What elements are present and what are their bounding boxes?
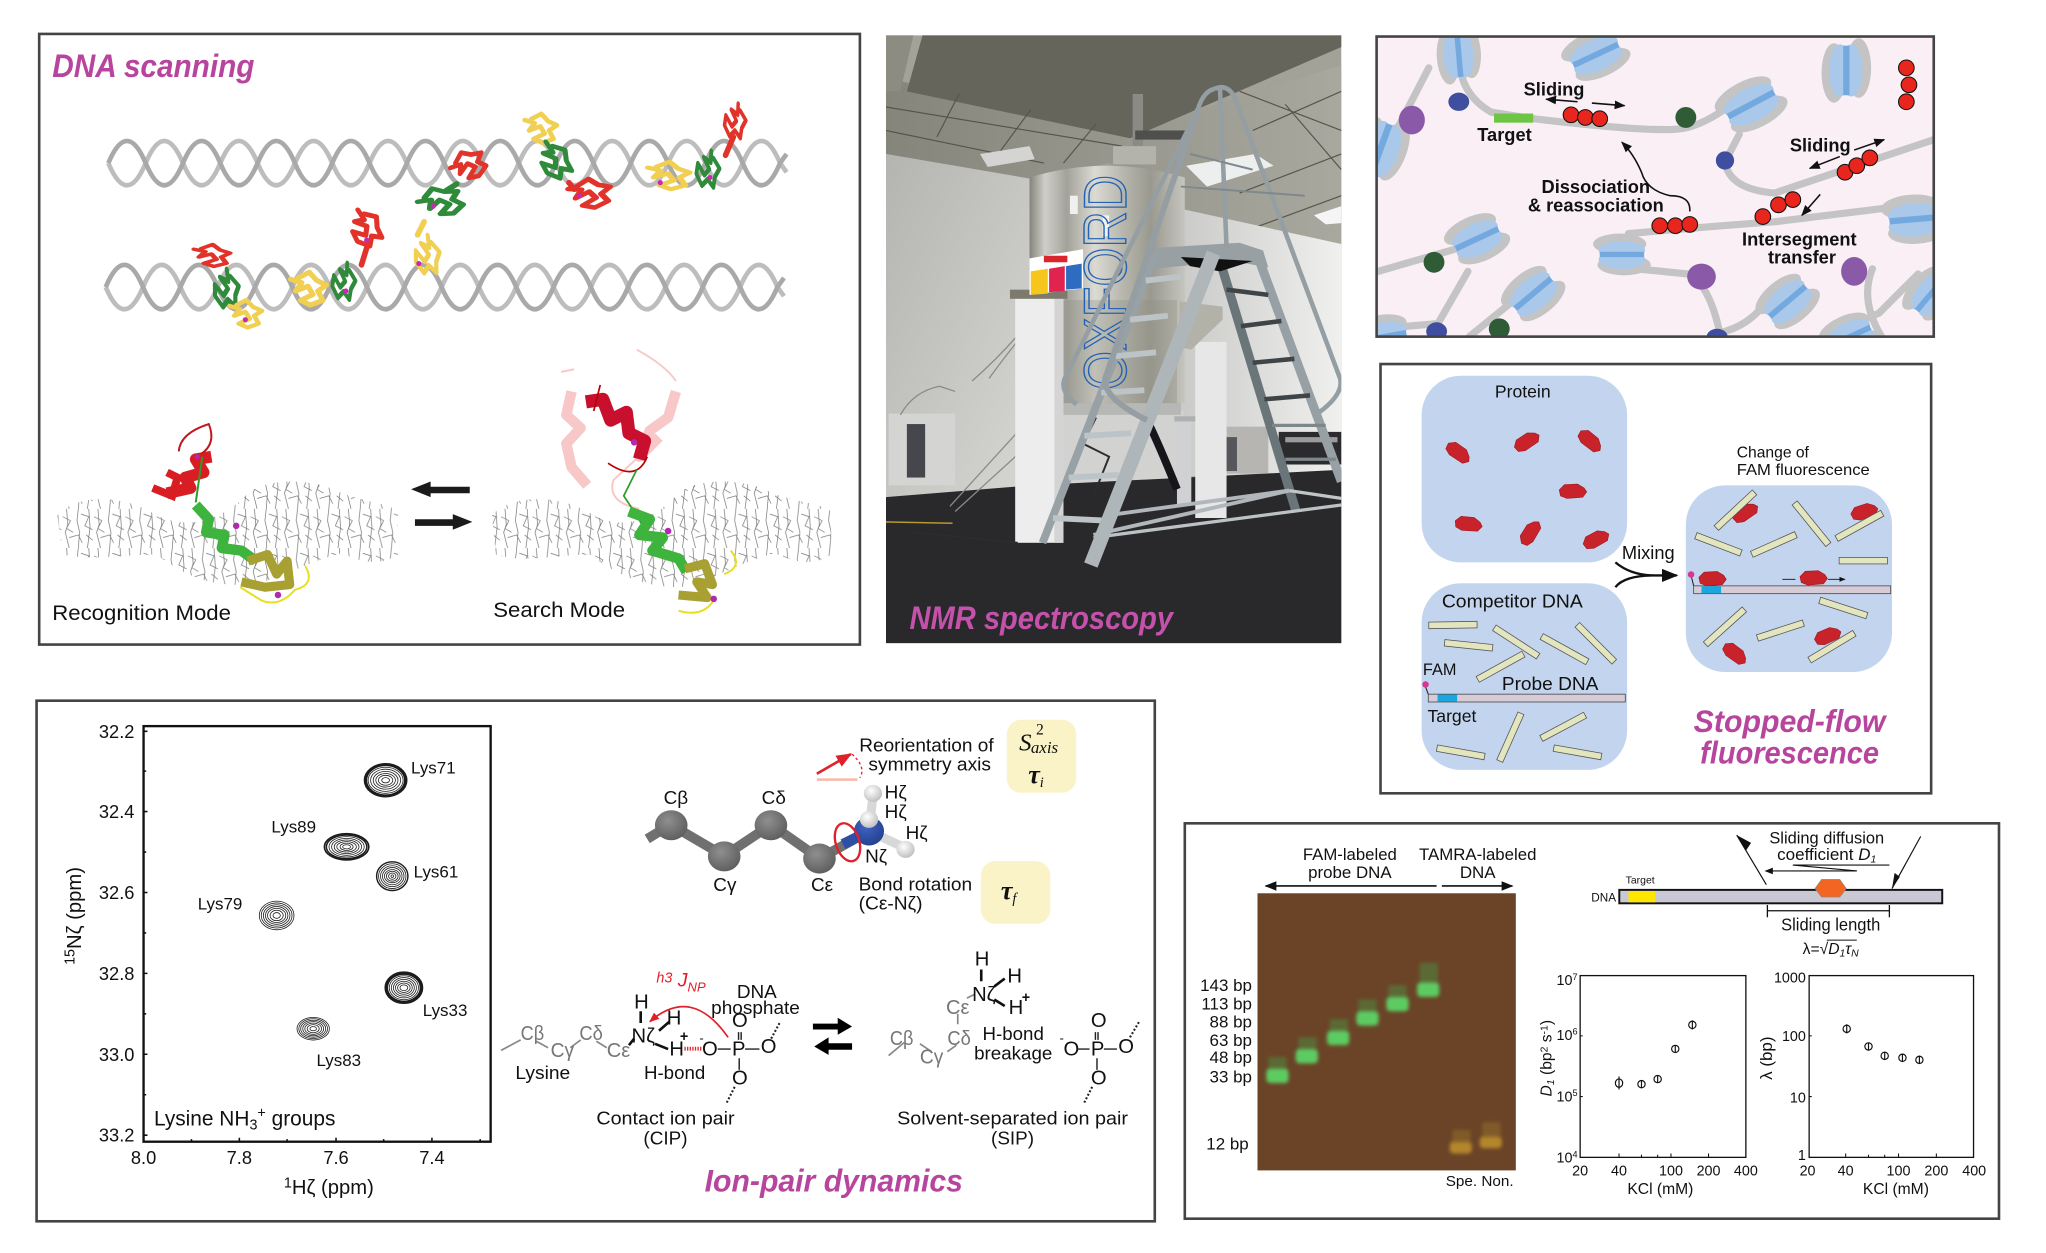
chart: lambda vs KCl xyxy=(1757,971,1986,1198)
title: Stopped-flow fluorescence: Stopped-flow xyxy=(1694,704,1888,739)
chart: D1 vs KCl: 6 xyxy=(1572,1027,1578,1037)
blob: competitor and probe DNA xyxy=(1422,583,1627,770)
contact ion pair: Cγ xyxy=(551,1040,575,1062)
gel size labels xyxy=(1200,976,1252,1154)
chart: D1 vs KCl: 2 xyxy=(1540,1046,1551,1052)
solvent-separated ion pair: H xyxy=(975,949,989,971)
proteins on DNA xyxy=(194,103,749,328)
sliding schematic: DNA xyxy=(1591,892,1616,905)
chart: D1 vs KCl: 10 xyxy=(1556,1028,1572,1044)
contact ion pair: O xyxy=(761,1036,776,1058)
chart: D1 vs KCl: 7 xyxy=(1572,972,1578,982)
magnet neck xyxy=(1113,94,1187,164)
chart: HSQC spectrum: 32.4 xyxy=(99,801,134,822)
panel: chromatin search schematic xyxy=(1344,20,1967,369)
lysine side-chain model: Hζ xyxy=(885,802,907,823)
chart: D1 vs KCl: D xyxy=(1538,1085,1555,1096)
gel size labels: 143 bp xyxy=(1200,976,1252,995)
chart: D1 vs KCl xyxy=(1538,972,1758,1198)
panel: gel and sliding measurements xyxy=(1185,823,1999,1219)
chart: D1 vs KCl: 100 xyxy=(1659,1164,1683,1180)
lysine side-chain model: Cγ xyxy=(713,875,737,896)
solvent-separated ion pair: (SIP) xyxy=(991,1128,1034,1149)
target segment xyxy=(1494,114,1533,123)
support pillars xyxy=(1010,290,1227,543)
chart: D1 vs KCl: s xyxy=(1538,1034,1555,1047)
nucleosomes xyxy=(1344,20,1967,369)
blob: mixed solution xyxy=(1686,485,1892,672)
solvent-separated ion pair xyxy=(889,949,1139,1149)
gel lane labels: DNA xyxy=(1460,863,1496,882)
air-conditioning unit xyxy=(889,414,955,485)
sliding schematic: 1 xyxy=(1871,854,1876,865)
fast motion box: τ xyxy=(1001,876,1012,905)
contact ion pair: O xyxy=(732,1067,748,1089)
chart: D1 vs KCl: 10 xyxy=(1556,973,1572,989)
chart: D1 vs KCl: 1 xyxy=(1546,1079,1557,1085)
solvent-separated ion pair: H-bond xyxy=(983,1024,1044,1045)
solvent-separated ion pair: - xyxy=(1060,1031,1064,1046)
sliding schematic: Target xyxy=(1626,875,1655,886)
panel: DNA scanning xyxy=(39,34,860,645)
chart: HSQC spectrum: 33.0 xyxy=(99,1044,134,1065)
blob: protein solution: Protein xyxy=(1495,381,1551,401)
contact ion pair: Contact ion pair xyxy=(596,1109,735,1130)
chart: lambda vs KCl: 400 xyxy=(1962,1164,1986,1180)
warning label xyxy=(1030,249,1083,295)
chart: HSQC spectrum: 7.4 xyxy=(419,1147,445,1168)
contact ion pair: DNA xyxy=(737,982,777,1003)
histone-bound proteins xyxy=(1399,93,1867,344)
chart: lambda vs KCl: 1 xyxy=(1798,1148,1806,1164)
lysine side-chain model xyxy=(647,783,928,896)
contact ion pair: Lysine xyxy=(515,1063,570,1084)
chart: lambda vs KCl: λ (bp) xyxy=(1757,1037,1776,1080)
gel size labels: 12 bp xyxy=(1206,1135,1249,1154)
chart: lambda vs KCl: 200 xyxy=(1924,1164,1948,1180)
label: change of FAM fluorescence: Change of xyxy=(1737,444,1810,461)
sliding schematic xyxy=(1591,829,1942,959)
chart: D1 vs KCl: 200 xyxy=(1697,1164,1721,1180)
gel lane labels: FAM-labeled xyxy=(1303,845,1397,864)
sliding schematic: λ=√D xyxy=(1803,941,1839,958)
label: Intersegment transfer: transfer xyxy=(1768,247,1836,268)
contact ion pair: NP xyxy=(688,980,706,995)
structure: search mode xyxy=(492,350,831,613)
solvent-separated ion pair: O xyxy=(1118,1036,1134,1058)
arrow: mixing: Mixing xyxy=(1622,542,1675,563)
chart: D1 vs KCl: 10 xyxy=(1556,1151,1572,1167)
platform xyxy=(1153,243,1268,269)
silver pod xyxy=(1180,301,1223,350)
order parameter box: axis xyxy=(1031,738,1059,757)
chart: D1 vs KCl: 4 xyxy=(1572,1149,1578,1159)
chart: lambda vs KCl: 10 xyxy=(1790,1091,1806,1107)
solvent-separated ion pair: O xyxy=(1091,1010,1107,1032)
solvent-separated ion pair: Cγ xyxy=(920,1046,944,1068)
label: Target: Target xyxy=(1477,124,1532,145)
solvent-separated ion pair: Cβ xyxy=(890,1028,913,1050)
chart: lambda vs KCl: 1000 xyxy=(1774,971,1806,987)
title: Ion-pair dynamics: Ion-pair dynamics xyxy=(705,1163,963,1198)
fast motion box xyxy=(981,861,1050,924)
gel lane labels: probe DNA xyxy=(1308,863,1392,882)
chart: HSQC spectrum: Nζ (ppm) xyxy=(64,867,86,949)
title: DNA scanning: DNA scanning xyxy=(52,47,255,84)
black hose xyxy=(1147,420,1177,489)
contact ion pair: Nζ xyxy=(632,1026,655,1048)
label: Dissociation and reassociation: & reassociation xyxy=(1528,194,1664,215)
order parameter box: i xyxy=(1040,775,1044,791)
gel size labels: 33 bp xyxy=(1210,1067,1252,1086)
chart: HSQC spectrum: + xyxy=(257,1106,266,1122)
solvent-separated ion pair: P xyxy=(1091,1039,1104,1061)
chart: lambda vs KCl: 40 xyxy=(1838,1164,1854,1180)
magnesium ions xyxy=(243,175,712,322)
contact ion pair: Cβ xyxy=(521,1023,544,1045)
gel lane labels: Spe. Non. xyxy=(1446,1173,1514,1190)
magnet cylinder xyxy=(1030,166,1185,403)
lysine side-chain model: Cβ xyxy=(664,788,688,809)
solvent-separated ion pair: H xyxy=(1009,997,1023,1019)
chart: HSQC spectrum: groups xyxy=(266,1107,335,1130)
label: Intersegment transfer: Intersegment xyxy=(1742,228,1857,249)
chart: HSQC spectrum: Lys89 xyxy=(271,817,316,836)
chart: D1 vs KCl: 400 xyxy=(1734,1164,1758,1180)
label: Dissociation and reassociation: Dissociation xyxy=(1542,176,1650,197)
panel: NMR photograph xyxy=(886,35,1341,643)
label: change of FAM fluorescence xyxy=(1737,444,1870,479)
contact ion pair: - xyxy=(699,1031,704,1046)
gel size labels: 88 bp xyxy=(1210,1013,1252,1032)
contact ion pair: Cε xyxy=(607,1040,630,1062)
solvent-separated ion pair: breakage xyxy=(974,1043,1052,1064)
order parameter box xyxy=(1007,720,1076,793)
title: NMR spectroscopy: NMR spectroscopy xyxy=(909,599,1175,636)
solvent-separated ion pair: + xyxy=(1022,990,1030,1006)
magnet brand lettering: OXFORD xyxy=(1072,175,1139,390)
fast motion box: f xyxy=(1012,891,1018,907)
contact ion pair: O xyxy=(702,1039,718,1061)
symmetry axis reorientation xyxy=(817,736,994,780)
chart: HSQC spectrum: Hζ (ppm) xyxy=(292,1177,374,1199)
floor equipment xyxy=(1227,427,1341,474)
floor cables xyxy=(913,418,1109,543)
contact ion pair: P xyxy=(732,1039,746,1061)
chart: HSQC spectrum: 3 xyxy=(249,1117,257,1133)
chart: D1 vs KCl: KCl (mM) xyxy=(1627,1181,1693,1198)
sliding schematic: N xyxy=(1851,948,1859,959)
chart: HSQC spectrum: 33.2 xyxy=(99,1125,134,1146)
gel lane labels: TAMRA-labeled xyxy=(1419,845,1536,864)
arrow: mixing xyxy=(1615,542,1677,587)
contact ion pair: Cδ xyxy=(579,1023,603,1045)
motion arrows xyxy=(1546,99,1884,215)
panel: stopped-flow fluorescence xyxy=(1381,364,1931,793)
blob: competitor and probe DNA: Competitor DNA xyxy=(1442,590,1584,611)
solvent-separated ion pair: Solvent-separated ion pair xyxy=(897,1109,1128,1130)
contact ion pair: H xyxy=(634,992,649,1014)
chart: HSQC spectrum: 1 xyxy=(284,1175,292,1191)
label: Recognition Mode: Recognition Mode xyxy=(52,601,231,625)
structure: recognition mode xyxy=(57,424,398,603)
chart: lambda vs KCl: 100 xyxy=(1782,1029,1806,1045)
contact ion pair: H xyxy=(667,1007,681,1029)
chart: HSQC spectrum: Lys61 xyxy=(414,862,458,881)
bond rotation label: (Cε-Nζ) xyxy=(859,893,923,914)
chart: D1 vs KCl: 5 xyxy=(1572,1088,1578,1098)
gel size labels: 48 bp xyxy=(1210,1048,1252,1067)
contact ion pair: + xyxy=(680,1029,688,1045)
contact ion pair: J xyxy=(672,969,688,991)
symmetry axis reorientation: Reorientation of xyxy=(859,736,994,757)
blob: protein solution xyxy=(1422,376,1627,562)
solvent-separated ion pair: Nζ xyxy=(972,984,996,1006)
contact ion pair: h3 xyxy=(656,971,672,987)
title: Stopped-flow fluorescence xyxy=(1694,704,1888,770)
chart: HSQC spectrum: 15 xyxy=(62,949,78,965)
label: Sliding left: Sliding xyxy=(1524,78,1584,99)
chart: D1 vs KCl: (bp xyxy=(1538,1052,1555,1079)
blob: competitor and probe DNA: Probe DNA xyxy=(1502,673,1599,694)
chart: D1 vs KCl: 40 xyxy=(1611,1164,1627,1180)
chart: HSQC spectrum: Lys83 xyxy=(316,1051,361,1070)
bond rotation label xyxy=(859,875,972,914)
gel size labels: 63 bp xyxy=(1210,1031,1252,1050)
sliding schematic: coefficient D xyxy=(1777,845,1870,864)
chart: HSQC spectrum: Lys71 xyxy=(411,759,456,778)
solvent-separated ion pair: O xyxy=(1091,1067,1107,1089)
lysine side-chain model: Cδ xyxy=(762,788,786,809)
peak contours xyxy=(259,764,422,1040)
gel image xyxy=(1257,893,1516,1170)
chart: HSQC spectrum: Lysine NH xyxy=(154,1107,249,1130)
lysine side-chain model: Cε xyxy=(811,875,834,896)
upper DNA helix xyxy=(108,141,787,185)
bond rotation label: Bond rotation xyxy=(859,875,972,896)
sliding schematic: Sliding diffusion xyxy=(1769,829,1884,848)
lysine side-chain model: Hζ xyxy=(885,783,907,804)
symmetry axis reorientation: symmetry axis xyxy=(868,754,991,775)
order parameter box: S xyxy=(1019,729,1031,756)
solvent-separated ion pair: Cδ xyxy=(947,1028,971,1050)
contact ion pair: O xyxy=(732,1010,748,1032)
label: change of FAM fluorescence: FAM fluorescence xyxy=(1737,462,1870,479)
chart: HSQC spectrum: 32.2 xyxy=(99,721,134,742)
chart: HSQC spectrum: 7.6 xyxy=(323,1147,349,1168)
equilibrium arrows xyxy=(411,481,472,530)
equilibrium arrows xyxy=(813,1018,852,1055)
label: Search Mode: Search Mode xyxy=(493,598,625,622)
blob: competitor and probe DNA: FAM xyxy=(1423,661,1456,679)
gel lane labels xyxy=(1303,845,1536,1190)
contact ion pair: H xyxy=(669,1039,684,1061)
panel: lysine NMR spectrum and ion-pair dynamics xyxy=(37,701,1155,1221)
solvent-separated ion pair: H xyxy=(1007,966,1022,988)
blob: competitor and probe DNA: Target xyxy=(1427,706,1477,726)
order parameter box: 2 xyxy=(1036,722,1044,739)
front ladder xyxy=(1043,87,1341,565)
chart: lambda vs KCl: 20 xyxy=(1800,1164,1816,1180)
title: Stopped-flow fluorescence: fluorescence xyxy=(1700,735,1879,770)
sliding schematic: Sliding length xyxy=(1781,914,1880,934)
solvent-separated ion pair: Cε xyxy=(946,997,970,1019)
solvent-separated ion pair: O xyxy=(1063,1039,1079,1061)
label: Sliding right: Sliding xyxy=(1790,134,1851,155)
chart: HSQC spectrum: 32.6 xyxy=(99,882,134,903)
lower DNA helix xyxy=(106,265,784,309)
chart: HSQC spectrum: Lys33 xyxy=(423,1001,467,1020)
lysine side-chain model: Hζ xyxy=(906,823,928,844)
chart: D1 vs KCl: 20 xyxy=(1572,1164,1588,1180)
chart: HSQC spectrum xyxy=(62,721,491,1199)
chart: D1 vs KCl: -1 xyxy=(1540,1025,1551,1034)
lysine side-chain model: Nζ xyxy=(865,846,887,867)
contact ion pair xyxy=(501,969,800,1149)
gel size labels: 113 bp xyxy=(1201,994,1252,1013)
chart: HSQC spectrum: 32.8 xyxy=(99,963,134,984)
chart: D1 vs KCl: 10 xyxy=(1556,1089,1572,1105)
chart: HSQC spectrum: Lys79 xyxy=(198,894,242,913)
sliding schematic: τ xyxy=(1845,941,1852,958)
sliding schematic: 1 xyxy=(1839,948,1845,959)
lane arrows xyxy=(1266,885,1512,887)
order parameter box: τ xyxy=(1028,760,1040,789)
contact ion pair: H-bond xyxy=(644,1063,705,1084)
contact ion pair: phosphate xyxy=(711,998,800,1019)
chart: D1 vs KCl: ) xyxy=(1538,1020,1555,1025)
chart: lambda vs KCl: 100 xyxy=(1887,1164,1911,1180)
red protein triads xyxy=(1563,60,1917,234)
right ladder xyxy=(1093,253,1341,538)
chart: HSQC spectrum: 7.8 xyxy=(227,1147,252,1168)
contact ion pair: (CIP) xyxy=(643,1128,688,1149)
chart: HSQC spectrum: 8.0 xyxy=(131,1147,156,1168)
chart: lambda vs KCl: KCl (mM) xyxy=(1863,1181,1929,1198)
